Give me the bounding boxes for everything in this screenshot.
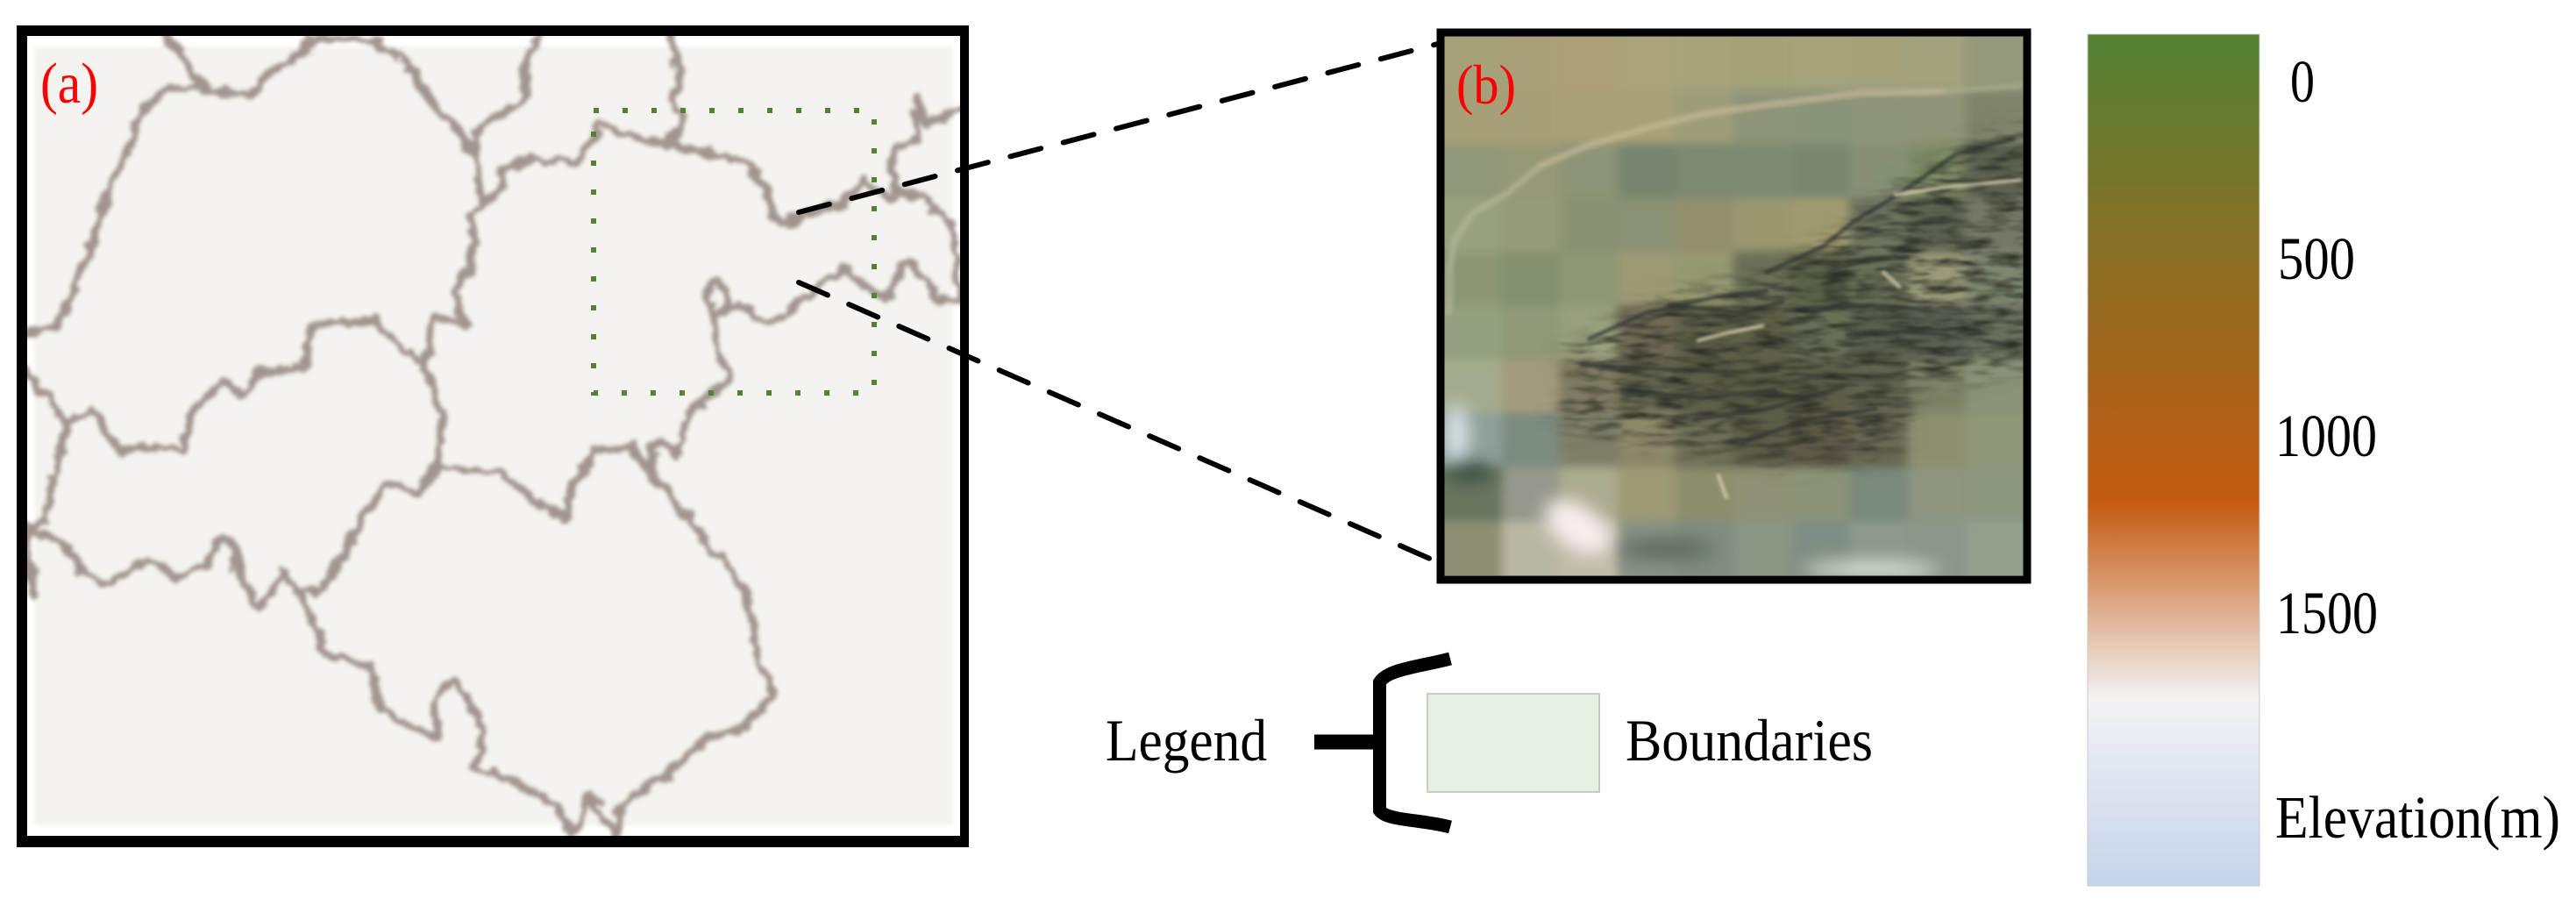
- label (b): (b): [1456, 54, 1516, 116]
- elevation labels: 500: [2278, 225, 2355, 292]
- mountain texture: [1554, 128, 2037, 464]
- frame (a): [17, 25, 969, 847]
- elevation labels: 1000: [2275, 403, 2377, 469]
- satellite terrain: [1445, 37, 2024, 575]
- zoom extent: dotted box: [594, 111, 874, 393]
- panel: satellite image (b): [1425, 18, 2045, 595]
- dashed connector: lower: [799, 282, 1438, 562]
- pale highlights: [1698, 180, 2020, 497]
- pale ridge arc: [1448, 86, 2020, 313]
- elevation labels: 1500: [2276, 580, 2378, 646]
- boundary lines: [27, 36, 960, 836]
- legend group: [1106, 659, 1873, 827]
- label (a): (a): [40, 52, 98, 116]
- dashed connector: upper: [799, 44, 1438, 212]
- mountain ridges: [1582, 139, 2012, 442]
- legend title: Legend: [1106, 707, 1267, 774]
- legend bracket: [1314, 659, 1450, 827]
- panel: boundary map (a): [0, 0, 991, 877]
- frame (b): [1441, 32, 2027, 580]
- elevation labels: 0: [2290, 48, 2315, 115]
- bright patches: [1445, 403, 1939, 577]
- elevation labels: [2275, 48, 2560, 851]
- legend label: Boundaries: [1626, 707, 1873, 774]
- elevation colour bar: [2088, 34, 2259, 886]
- legend swatch: [1427, 694, 1599, 792]
